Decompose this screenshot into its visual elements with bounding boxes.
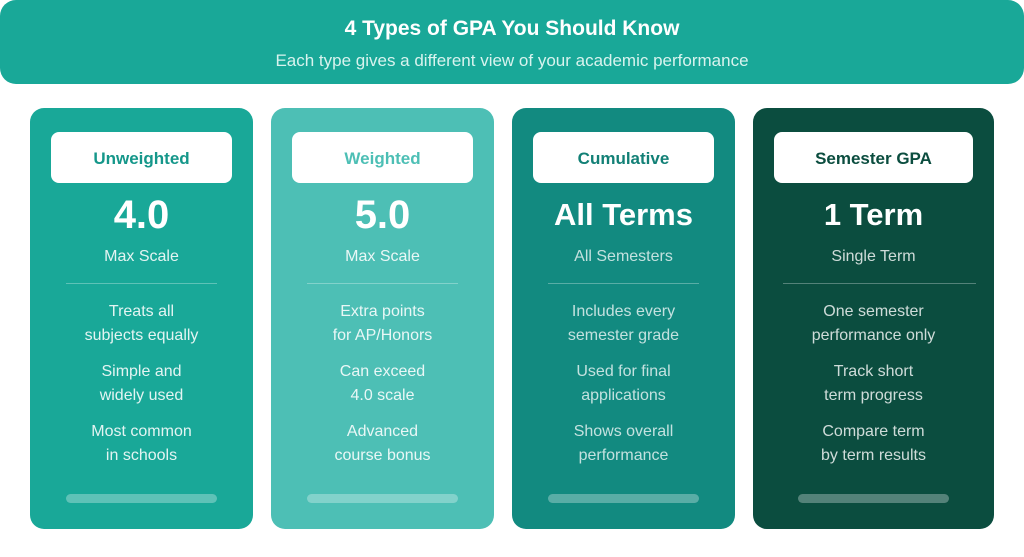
big value: All Terms <box>554 197 693 232</box>
panel: weighted: course bonus <box>334 447 431 464</box>
points: Extra points <box>340 303 425 320</box>
panel: cumulative: Used for final <box>576 363 671 380</box>
panel: unweighted: Most common <box>91 423 192 440</box>
big value: 5.0 <box>355 193 410 237</box>
panel: semester: Track short <box>834 363 913 380</box>
points <box>332 303 432 344</box>
points: Includes every <box>572 303 675 320</box>
points <box>85 303 198 344</box>
big value: 1 Term <box>824 197 923 232</box>
big value: 4.0 <box>114 193 169 237</box>
panel: cumulative <box>512 108 735 529</box>
header <box>0 0 1024 84</box>
panel: semester: Single Term <box>831 248 916 265</box>
panel: unweighted: in schools <box>106 447 177 464</box>
label <box>292 132 473 183</box>
panel: cumulative: performance <box>579 447 668 464</box>
panel: weighted: Advanced <box>347 423 418 440</box>
points: subjects equally <box>85 327 198 344</box>
label: Semester GPA <box>815 149 932 168</box>
label: Unweighted <box>93 149 190 168</box>
points: semester grade <box>568 327 679 344</box>
panel: unweighted: widely used <box>100 387 183 404</box>
panel: semester <box>753 108 994 529</box>
label: Cumulative <box>578 149 669 168</box>
points: for AP/Honors <box>333 327 432 344</box>
panel: semester: Compare term <box>822 423 925 440</box>
panel: unweighted: Max Scale <box>104 248 179 265</box>
label <box>774 132 973 183</box>
panel: weighted: Max Scale <box>345 248 420 265</box>
label <box>533 132 714 183</box>
panel: cumulative: All Semesters <box>574 248 673 265</box>
panel: weighted: Can exceed <box>340 363 425 380</box>
points: Treats all <box>109 303 174 320</box>
points <box>812 303 936 344</box>
panel: unweighted <box>30 108 253 529</box>
label <box>51 132 232 183</box>
points <box>568 303 679 344</box>
label: Weighted <box>344 149 421 168</box>
panel: cumulative: Shows overall <box>574 423 673 440</box>
panel: cumulative: applications <box>581 387 666 404</box>
points: performance only <box>812 327 935 344</box>
panel: semester: term progress <box>824 387 923 404</box>
title: 4 Types of GPA You Should Know <box>345 17 679 40</box>
panel: semester: by term results <box>821 447 926 464</box>
points: One semester <box>823 303 924 320</box>
panel: weighted: 4.0 scale <box>350 387 415 404</box>
panel: unweighted: Simple and <box>101 363 182 380</box>
panel: weighted <box>271 108 494 529</box>
subtitle: Each type gives a different view of your academic performance <box>275 51 749 70</box>
